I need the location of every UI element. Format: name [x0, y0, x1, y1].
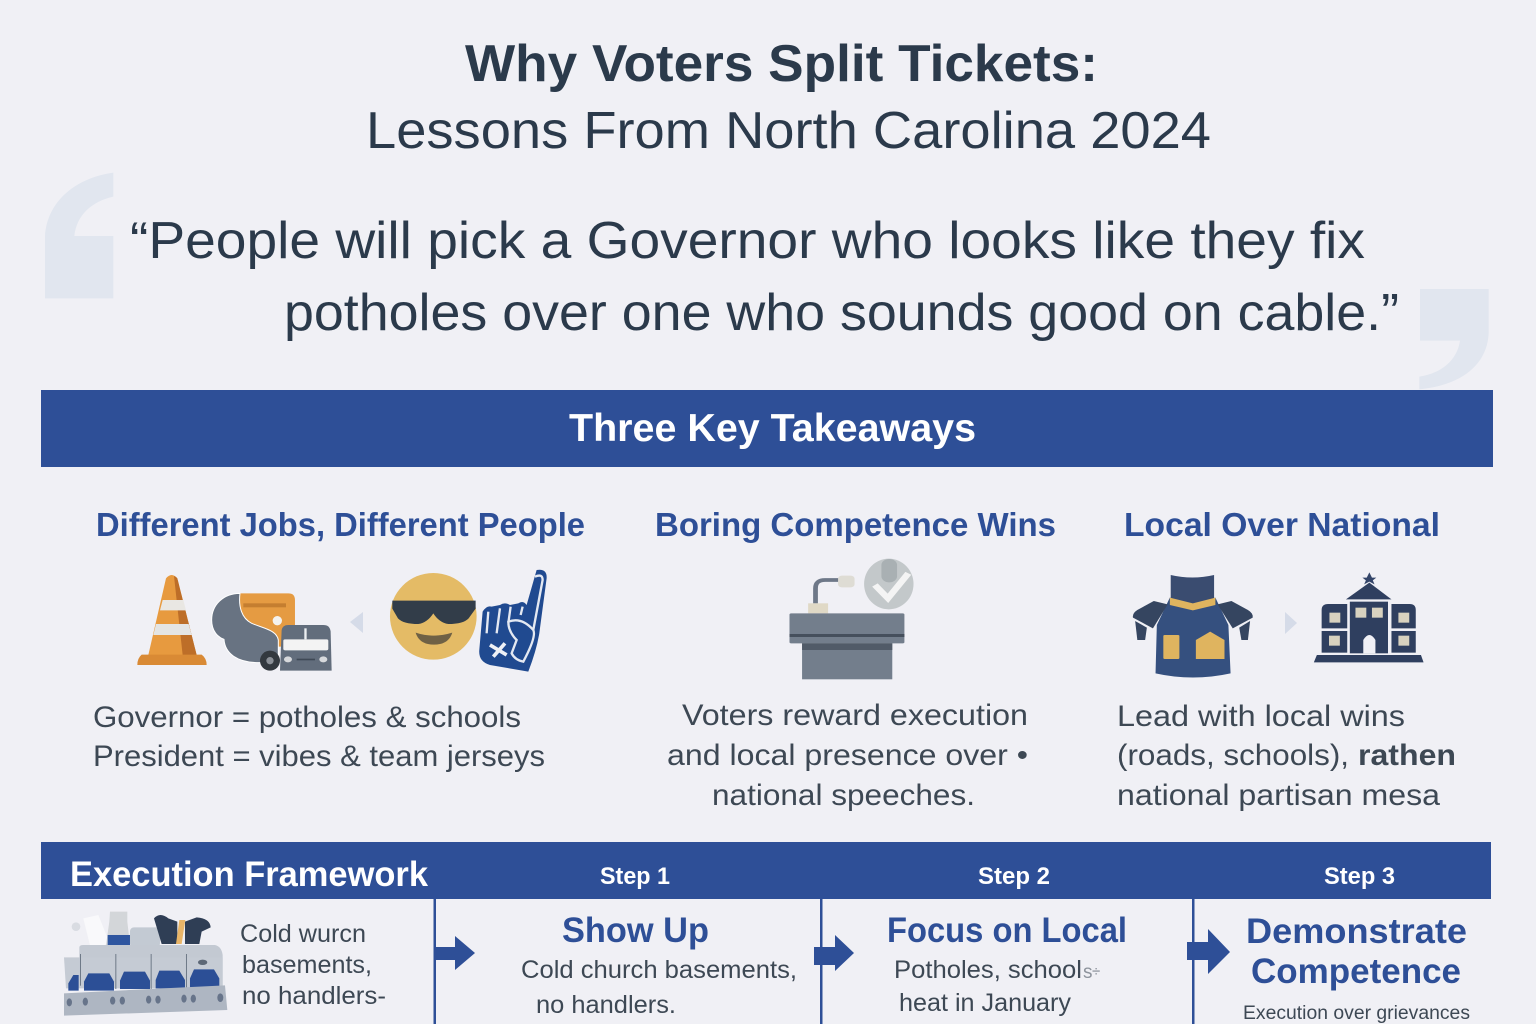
icon: sunglasses emoji — [390, 573, 477, 660]
text: local over national body: national partisan mesa — [1117, 779, 1440, 812]
text: local over national body: rathen — [1358, 739, 1456, 772]
icon: traffic cone — [137, 575, 207, 665]
panel: step 2 — [887, 911, 1127, 1017]
pull quote — [130, 212, 1399, 342]
icon: school building — [1314, 572, 1424, 662]
heading: boring competence: Boring Competence Wins — [655, 506, 1056, 543]
panel: step 2: s — [1083, 962, 1092, 983]
text: different jobs body: Governor = potholes & schools — [93, 701, 521, 734]
text: boring competence body: and local presence over • — [667, 739, 1028, 772]
icon: church basement seats — [64, 912, 227, 1016]
header bar: execution framework steps — [41, 842, 1491, 899]
panel: step 2: Potholes, school — [894, 956, 1082, 984]
text: different jobs body — [93, 701, 545, 773]
banner: three key takeaways: Three Key Takeaways — [569, 407, 976, 450]
text: different jobs body: President = vibes & team jerseys — [93, 740, 545, 773]
pull quote: “People will pick a Governor who looks like they fix — [130, 212, 1365, 270]
panel: intro column — [64, 912, 386, 1016]
heading: local over national: Local Over National — [1124, 506, 1440, 543]
panel: step 1: Show Up — [562, 911, 709, 950]
arrow: pointing left — [350, 612, 363, 633]
arrow: to step 3 — [1187, 929, 1230, 974]
panel: step 2: heat in January — [899, 989, 1071, 1017]
panel: step 3 — [1243, 912, 1470, 1024]
title: Lessons From North Carolina 2024 — [366, 102, 1211, 160]
panel: boring competence — [655, 506, 1056, 812]
text: intro column body — [240, 920, 386, 1010]
title — [366, 35, 1211, 160]
icon: foam finger — [479, 570, 547, 672]
text: local over national body: (roads, schools), — [1117, 739, 1349, 772]
panel: step 3: Execution over grievances — [1243, 1003, 1470, 1024]
text: boring competence body — [667, 699, 1028, 812]
text: intro column body: Cold wurcn — [240, 920, 366, 948]
icon: right decorative quote mark — [1419, 289, 1489, 389]
panel: step 3: Competence — [1251, 952, 1461, 991]
text: local over national body: Lead with local wins — [1117, 700, 1405, 733]
arrow: to step 1 — [435, 936, 475, 970]
panel: different jobs — [93, 506, 585, 773]
panel: step 2: ÷ — [1092, 963, 1100, 980]
heading: different jobs: Different Jobs, Different People — [96, 506, 585, 543]
title: Why Voters Split Tickets: — [465, 35, 1098, 93]
text: boring competence body: national speeches. — [712, 779, 975, 812]
text: intro column body: basements, — [242, 951, 372, 979]
panel: step 2: Focus on Local — [887, 911, 1127, 950]
panel: local over national — [1117, 506, 1456, 812]
panel: step 1 — [521, 911, 797, 1019]
header bar: execution framework steps: Step 2 — [978, 863, 1050, 890]
pull quote: potholes over one who sounds good on cable.” — [284, 284, 1399, 342]
panel: step 3: Demonstrate — [1246, 912, 1467, 951]
text: local over national body — [1117, 700, 1456, 812]
banner: three key takeaways — [41, 390, 1493, 467]
icon: podium with checkmark — [789, 559, 914, 679]
icon: pothole repair truck — [212, 593, 332, 671]
icon: local jersey — [1133, 575, 1253, 677]
arrow: to step 2 — [814, 935, 854, 971]
header bar: execution framework steps: Step 3 — [1324, 863, 1395, 890]
panel: step 1: Cold church basements, — [521, 956, 797, 984]
text: intro column body: no handlers- — [242, 982, 386, 1010]
header bar: execution framework steps: Step 1 — [600, 863, 670, 890]
text: boring competence body: Voters reward execution — [682, 699, 1028, 732]
panel: step 1: no handlers. — [536, 991, 676, 1019]
arrow: pointing right — [1285, 612, 1297, 634]
header bar: execution framework steps: Execution Framework — [70, 855, 429, 894]
icon: left decorative quote mark — [45, 173, 113, 298]
